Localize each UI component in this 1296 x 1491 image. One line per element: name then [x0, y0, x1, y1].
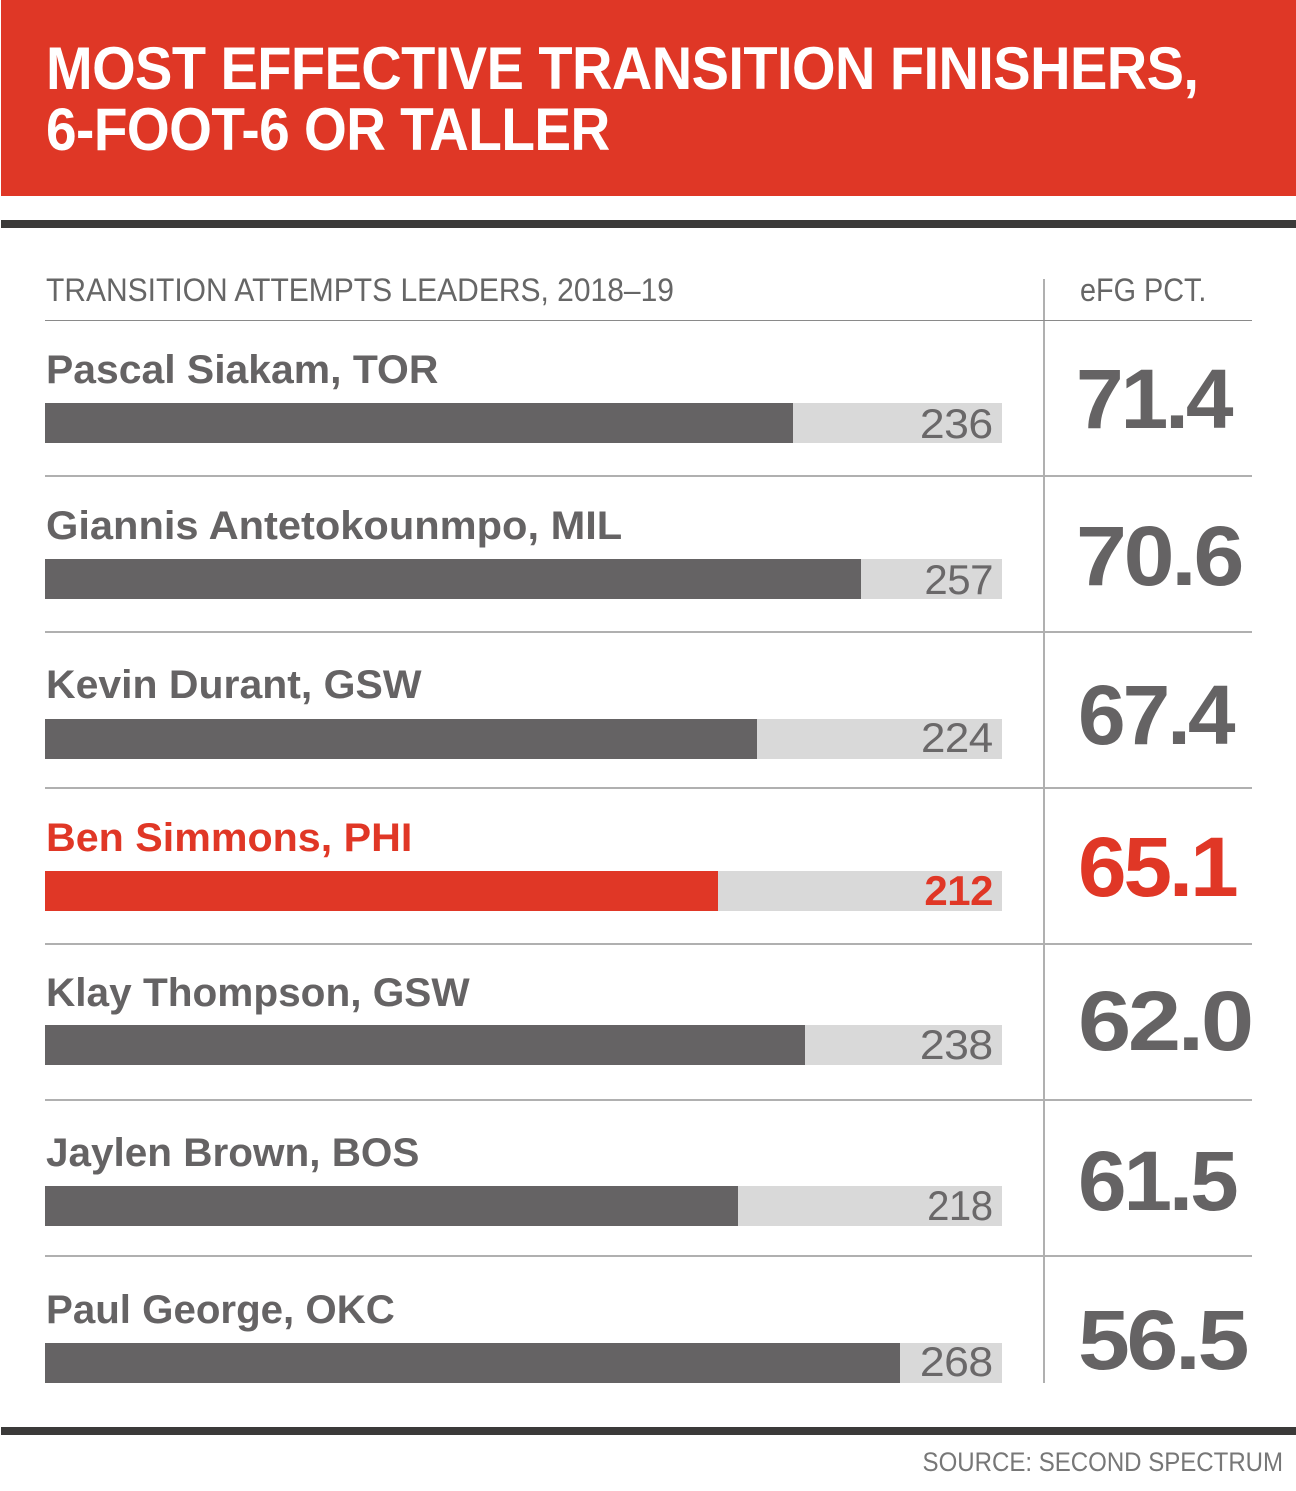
- player name: Kevin Durant, GSW: [46, 663, 422, 707]
- row: Giannis Antetokounmpo: [45, 504, 1242, 603]
- column heading: attempts: TRANSITION ATTEMPTS LEADERS, 2018–19: [46, 272, 674, 308]
- eFG value: 71.4: [1076, 352, 1231, 446]
- player name: Klay Thompson, GSW: [46, 971, 470, 1015]
- eFG value: 61.5: [1078, 1134, 1236, 1228]
- player name: Jaylen Brown, BOS: [46, 1131, 419, 1175]
- title banner: [1, 0, 1296, 196]
- attempts bar: [45, 1186, 1002, 1226]
- bottom rule: [1, 1427, 1296, 1435]
- attempts bar: [45, 871, 1002, 911]
- eFG value: 65.1: [1078, 820, 1236, 914]
- title: MOST EFFECTIVE TRANSITION FINISHERS,: [46, 35, 1198, 102]
- attempts bar: 212: [924, 867, 993, 914]
- attempts bar: [45, 1343, 1002, 1383]
- eFG value: 56.5: [1078, 1293, 1246, 1387]
- attempts bar: 268: [920, 1338, 993, 1385]
- attempts bar: 257: [924, 556, 993, 603]
- source: SOURCE: SECOND SPECTRUM: [923, 1447, 1283, 1477]
- eFG value: 62.0: [1078, 974, 1251, 1068]
- row: Klay Thompson: [45, 971, 1251, 1068]
- attempts bar: [45, 403, 1002, 443]
- attempts bar: 224: [921, 714, 993, 761]
- attempts bar: [45, 719, 1002, 759]
- title: [46, 35, 1198, 163]
- row: Kevin Durant: [45, 663, 1236, 762]
- attempts bar: 236: [920, 400, 993, 447]
- row: Paul George: [45, 1288, 1247, 1387]
- player name: Pascal Siakam, TOR: [46, 348, 438, 392]
- player name: Paul George, OKC: [46, 1288, 395, 1332]
- top rule: [1, 220, 1296, 228]
- player name: Ben Simmons, PHI: [46, 816, 412, 860]
- row: Jaylen Brown: [45, 1131, 1236, 1229]
- column heading: eFG: eFG PCT.: [1080, 272, 1206, 308]
- row: Pascal Siakam: [45, 348, 1234, 447]
- eFG value: 67.4: [1078, 668, 1233, 762]
- eFG value: 70.6: [1076, 509, 1241, 603]
- attempts bar: [45, 1025, 1002, 1065]
- row: Ben Simmons (highlight): [45, 816, 1236, 914]
- attempts bar: 218: [928, 1182, 993, 1229]
- attempts bar: 238: [920, 1021, 993, 1068]
- attempts bar: [45, 559, 1002, 599]
- player name: Giannis Antetokounmpo, MIL: [46, 504, 622, 548]
- title: 6-FOOT-6 OR TALLER: [46, 96, 610, 163]
